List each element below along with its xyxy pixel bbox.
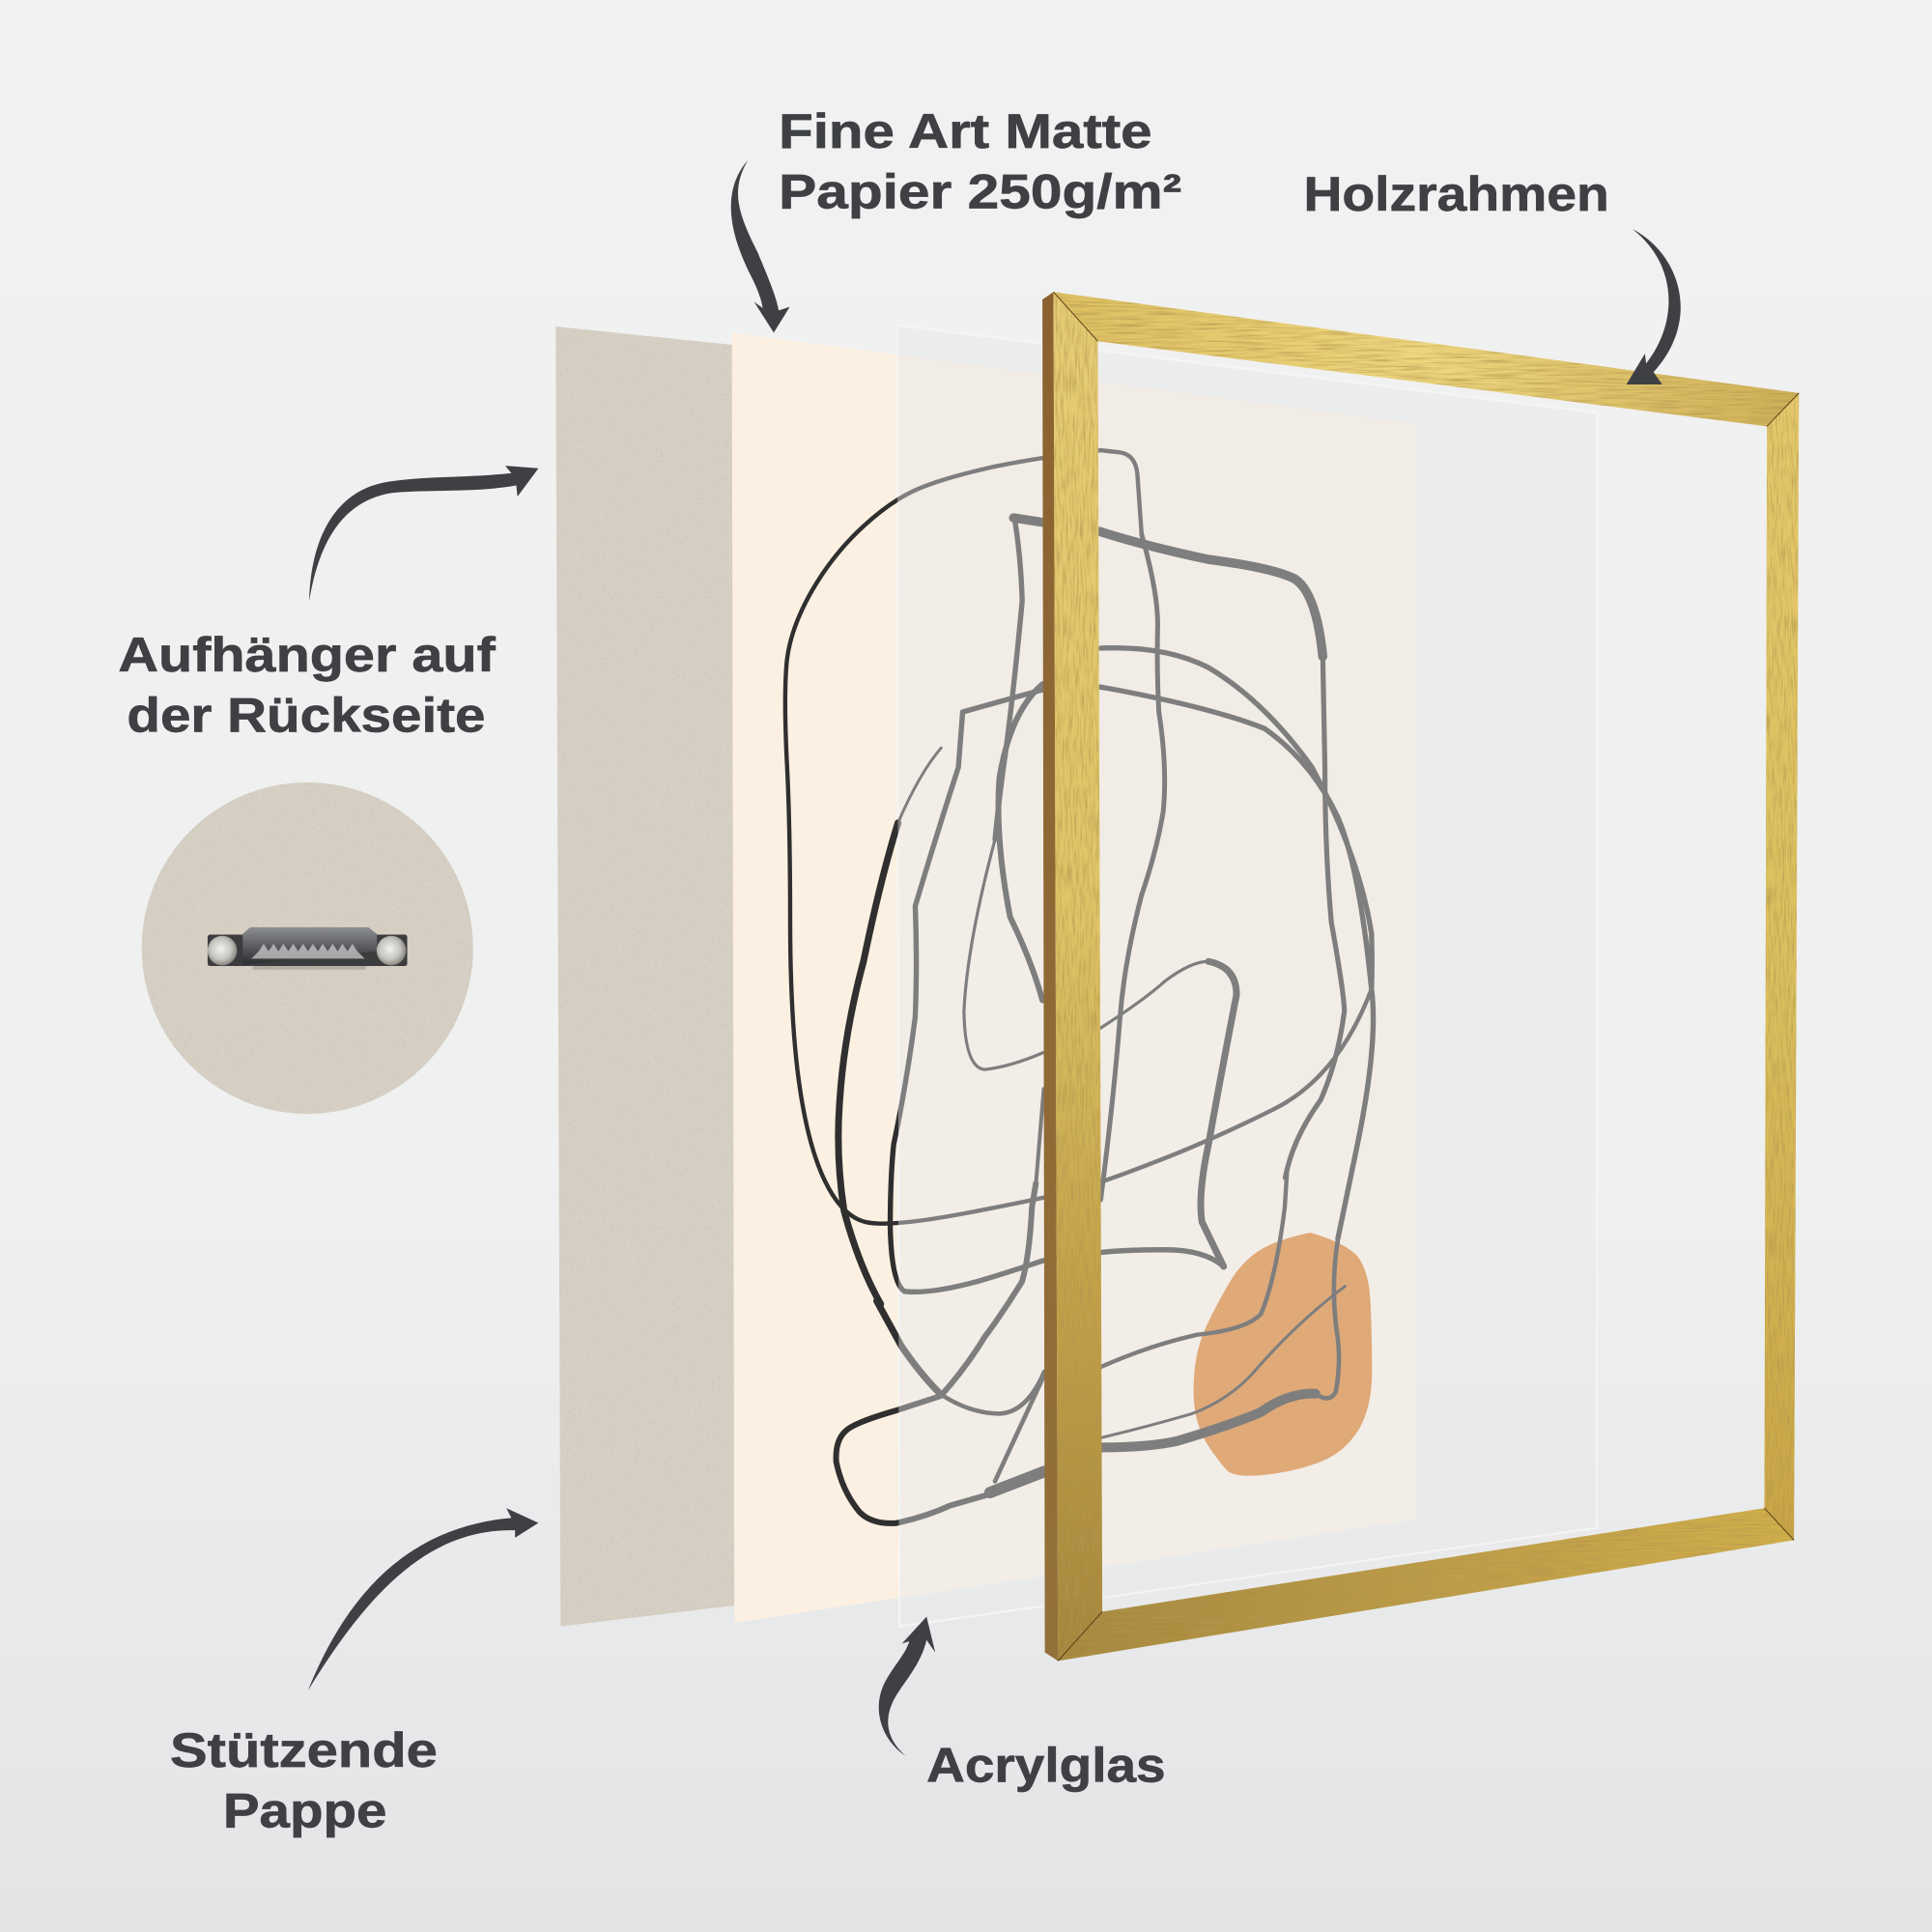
arrow: to acrylic glass [879,1616,935,1756]
artwork: orange blob [1194,1233,1372,1476]
panel: cardboard backing [555,327,734,1627]
arrow: to wooden frame [1627,229,1681,384]
heading: Stützende Pappe: Pappe [223,1784,387,1838]
artwork: abstract line drawing, grey through acrylic [896,448,1376,1526]
heading: Fine Art Matte Papier: Papier 250g/m² [779,165,1181,219]
icon: circular detail of sawtooth hanger [142,782,473,1114]
heading: Holzrahmen: Holzrahmen [1303,167,1609,221]
heading: Stützende Pappe [170,1723,438,1838]
heading: Acrylglas: Acrylglas [926,1738,1166,1792]
arrow: to cardboard from hanger label [309,466,538,601]
arrow: to fine art paper [731,160,790,332]
heading: Aufhänger auf der Rückseite: Aufhänger auf [118,628,496,682]
arrow: to cardboard from support label [308,1508,538,1690]
heading: Aufhänger auf der Rückseite [118,628,496,743]
heading: Stützende Pappe: Stützende [170,1723,438,1777]
panel: fine art paper [732,332,1417,1623]
heading: Fine Art Matte Papier: Fine Art Matte [779,104,1152,158]
artwork: abstract line drawing, dark outside acrylic [782,497,899,1526]
heading: Fine Art Matte Papier [779,104,1181,219]
heading: Aufhänger auf der Rückseite: der Rückseite [127,689,486,743]
wooden frame [1042,292,1799,1661]
panel: acrylic glass [897,326,1597,1627]
